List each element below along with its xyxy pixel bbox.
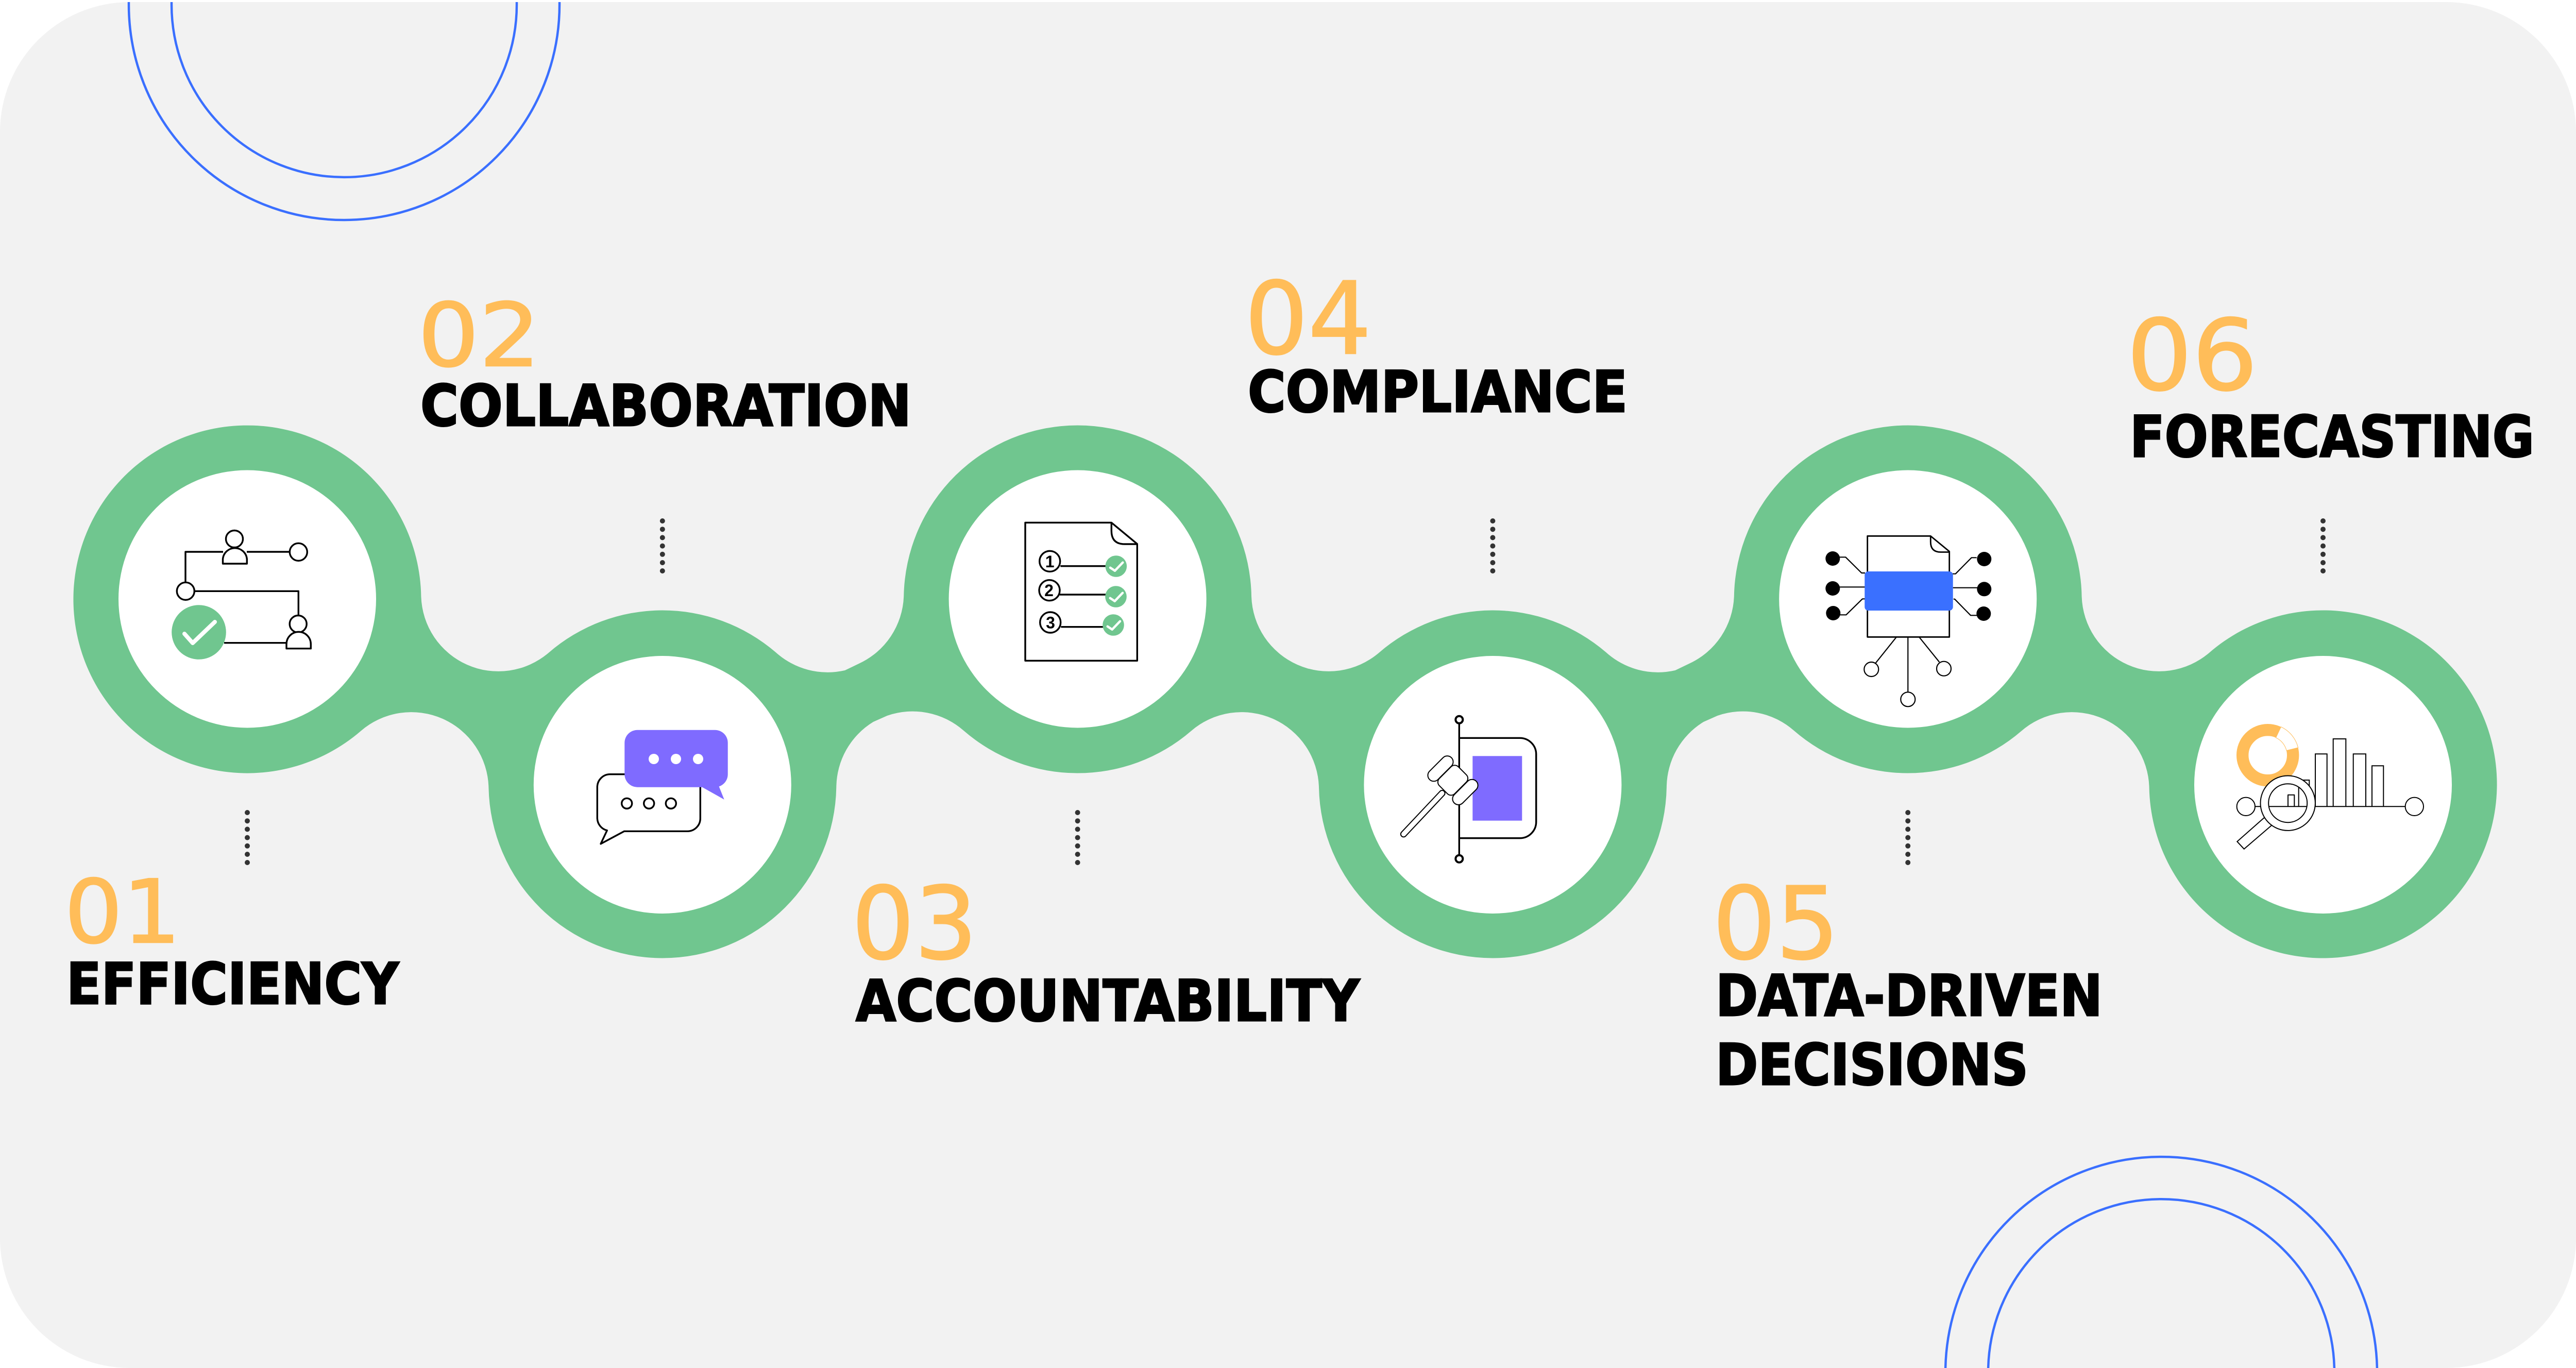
- dotted connector 2: [660, 518, 665, 573]
- dotted connector 1: [245, 810, 250, 865]
- decorative rings bottom: [1945, 1157, 2377, 1368]
- dotted connector 3: [1075, 810, 1080, 865]
- number 05: 05: [1713, 866, 1839, 982]
- heading data-driven decisions: DECISIONS: [1716, 1032, 2028, 1099]
- heading data-driven decisions: DATA-DRIVEN: [1716, 963, 2103, 1029]
- number 02: 02: [418, 285, 540, 387]
- icon: chat bubbles: [597, 730, 728, 844]
- icon: numbered checklist document: 2: [1044, 581, 1054, 600]
- green wavy connector band: [73, 426, 2497, 958]
- white circle 1: [118, 470, 376, 728]
- dotted connector 5: [1905, 810, 1910, 865]
- icon: numbered checklist document: [1025, 522, 1137, 661]
- number 01: 01: [64, 862, 181, 964]
- white circle 5: [1779, 470, 2037, 728]
- dotted connector 6: [2320, 518, 2326, 573]
- dotted connector 4: [1490, 518, 1495, 573]
- icon: numbered checklist document: 3: [1046, 613, 1055, 632]
- heading accountability: ACCOUNTABILITY: [856, 968, 1360, 1035]
- number 06: 06: [2127, 299, 2258, 413]
- icon: gavel and document: [1400, 716, 1536, 863]
- number 04: 04: [1245, 261, 1371, 377]
- white circle 2: [534, 656, 791, 914]
- decorative rings top: [129, 2, 560, 220]
- white circle 6: [2194, 656, 2452, 914]
- heading forecasting: FORECASTING: [2130, 404, 2534, 470]
- icon: workflow people with check: [172, 531, 311, 660]
- heading compliance: COMPLIANCE: [1248, 359, 1628, 426]
- heading efficiency: EFFICIENCY: [66, 951, 399, 1018]
- number 03: 03: [852, 866, 977, 982]
- heading data-driven decisions: [1716, 963, 2103, 1099]
- heading collaboration: COLLABORATION: [420, 373, 911, 440]
- white circle 4: [1364, 656, 1621, 914]
- icon: data document with nodes: [1825, 536, 1991, 706]
- icon: forecasting charts with magnifier: [2237, 727, 2424, 849]
- white circle 3: [949, 470, 1207, 728]
- icon: numbered checklist document: 1: [1045, 552, 1055, 571]
